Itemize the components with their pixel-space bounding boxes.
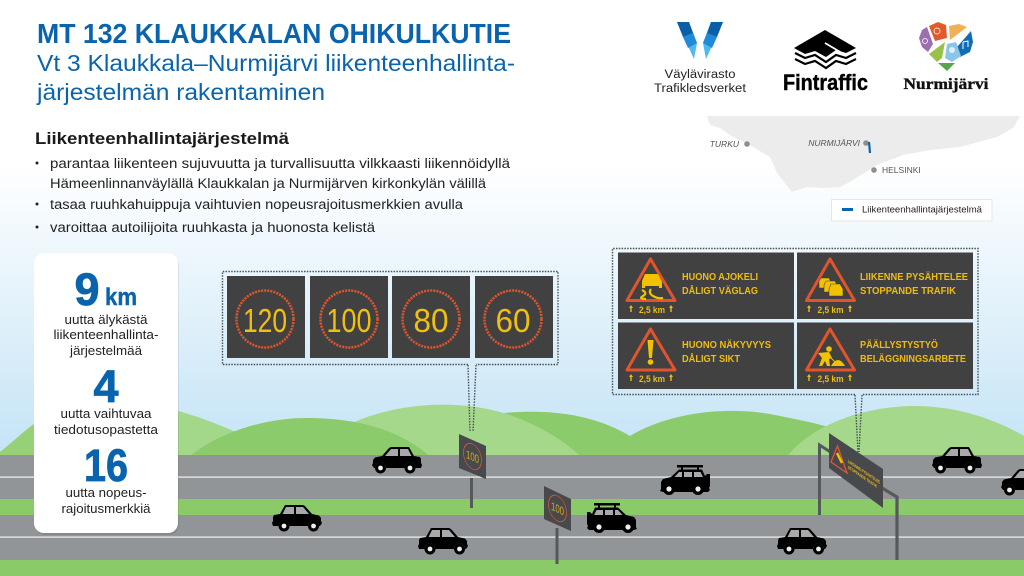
stat: 9 km: järjestelmää <box>69 343 143 358</box>
stat: 9 km: 9 <box>74 264 100 315</box>
sign: stopping traffic: STOPPANDE TRAFIK <box>860 286 957 297</box>
location map: NURMIJÄRVI <box>808 138 861 148</box>
stat: 16: uutta nopeus- <box>66 485 146 500</box>
stat: 16 <box>62 440 151 516</box>
section heading: Liikenteenhallintajärjestelmä <box>35 129 290 148</box>
car <box>418 528 468 554</box>
sign: stopping traffic <box>797 252 973 319</box>
sign: paving work: BELÄGGNINGSARBETE <box>860 352 966 365</box>
location map <box>707 116 1020 192</box>
sign: 80: 80 <box>414 302 448 339</box>
roadside speed sign 2 <box>544 486 571 564</box>
roadside speed sign 1 <box>459 434 486 508</box>
panel: speed limit signs <box>222 272 558 432</box>
stats card <box>34 253 179 535</box>
map legend: Liikenteenhallintajärjestelmä <box>862 204 983 216</box>
roadside speed sign 1: 100 <box>466 447 479 467</box>
logo: Nurmijärvi <box>904 22 989 93</box>
suv <box>660 465 710 495</box>
map legend <box>832 200 992 221</box>
stat: 4: 4 <box>93 361 119 412</box>
stat: 4: tiedotusopastetta <box>54 422 159 437</box>
sign: poor road conditions: DÅLIGT VÄGLAG <box>682 284 758 297</box>
sign: 100: 100 <box>326 302 372 339</box>
overhead gantry sign <box>820 433 897 560</box>
sign: poor visibility: HUONO NÄKYVYYS <box>682 338 771 351</box>
stat: 9 km <box>54 264 158 358</box>
sign: paving work: 2,5 km <box>818 374 844 384</box>
sign: poor visibility: DÅLIGT SIKT <box>682 352 740 365</box>
hills <box>0 403 1024 460</box>
overhead gantry sign: STOPPANDE TRAFIK <box>848 465 877 490</box>
car <box>1001 469 1024 496</box>
stat: 16: 16 <box>84 440 128 491</box>
sign: poor visibility <box>618 322 794 389</box>
logo: Väylävirasto: Trafikledsverket <box>654 83 747 95</box>
sign: 120: 120 <box>243 302 287 339</box>
sign: poor visibility: 2,5 km <box>639 374 665 384</box>
stat: 4 <box>54 361 159 437</box>
logo: Fintraffic: Fintraffic <box>783 70 868 95</box>
stat: 4: uutta vaihtuvaa <box>60 406 152 421</box>
subtitle <box>36 50 515 105</box>
bullet list <box>36 156 511 235</box>
car <box>932 447 982 474</box>
sign: poor road conditions: HUONO AJOKELI <box>682 272 758 283</box>
roadside speed sign 2: 100 <box>551 499 564 519</box>
sign: 120 <box>227 276 305 358</box>
logo: Väylävirasto <box>654 22 747 95</box>
sign: poor road conditions <box>618 252 794 319</box>
sign: paving work <box>797 322 973 389</box>
logo: Fintraffic <box>783 30 868 95</box>
sign: paving work: PÄÄLLYSTYSTYÖ <box>860 338 938 351</box>
suv <box>587 503 637 533</box>
bullet list: parantaa liikenteen sujuvuutta ja turvallisuutta vilkkaasti liikennöidyllä <box>50 156 511 171</box>
sky background <box>0 0 1024 460</box>
sign: poor road conditions: 2,5 km <box>639 305 665 315</box>
logo: Nurmijärvi: Nurmijärvi <box>904 76 989 93</box>
location map: HELSINKI <box>882 165 921 175</box>
overhead gantry sign: LIIKENNE PYSÄHTELEE <box>848 458 880 486</box>
sign: stopping traffic: LIIKENNE PYSÄHTELEE <box>860 270 968 283</box>
sign: 100 <box>310 276 388 358</box>
car <box>272 505 322 532</box>
stat: 16: rajoitusmerkkiä <box>62 501 151 516</box>
bullet list: varoittaa autoilijoita ruuhkasta ja huonosta kelistä <box>50 220 376 235</box>
sign: 80 <box>392 276 470 358</box>
car <box>777 528 827 554</box>
stat: 9 km: km <box>105 284 137 311</box>
bullet list: tasaa ruuhkahuippuja vaihtuvien nopeusrajoitusmerkkien avulla <box>50 197 464 212</box>
sign: stopping traffic: 2,5 km <box>818 305 844 315</box>
sign: 60 <box>475 276 553 358</box>
road and verges <box>0 455 1024 576</box>
title: MT 132 KLAUKKALAN OHIKULKUTIE <box>37 18 511 49</box>
stat: 9 km: liikenteenhallinta- <box>54 327 158 342</box>
location map: TURKU <box>710 139 740 149</box>
car <box>372 447 422 474</box>
subtitle: Vt 3 Klaukkala–Nurmijärvi liikenteenhallinta- <box>37 50 515 76</box>
bullet list: Hämeenlinnanväylällä Klaukkalan ja Nurmijärven kirkonkylän välillä <box>50 176 487 191</box>
subtitle: järjestelmän rakentaminen <box>36 79 325 105</box>
logo: Väylävirasto: Väylävirasto <box>664 69 736 81</box>
sign: 60: 60 <box>496 302 530 339</box>
panel: warning signs <box>612 248 978 452</box>
stat: 9 km: uutta älykästä <box>64 312 148 327</box>
